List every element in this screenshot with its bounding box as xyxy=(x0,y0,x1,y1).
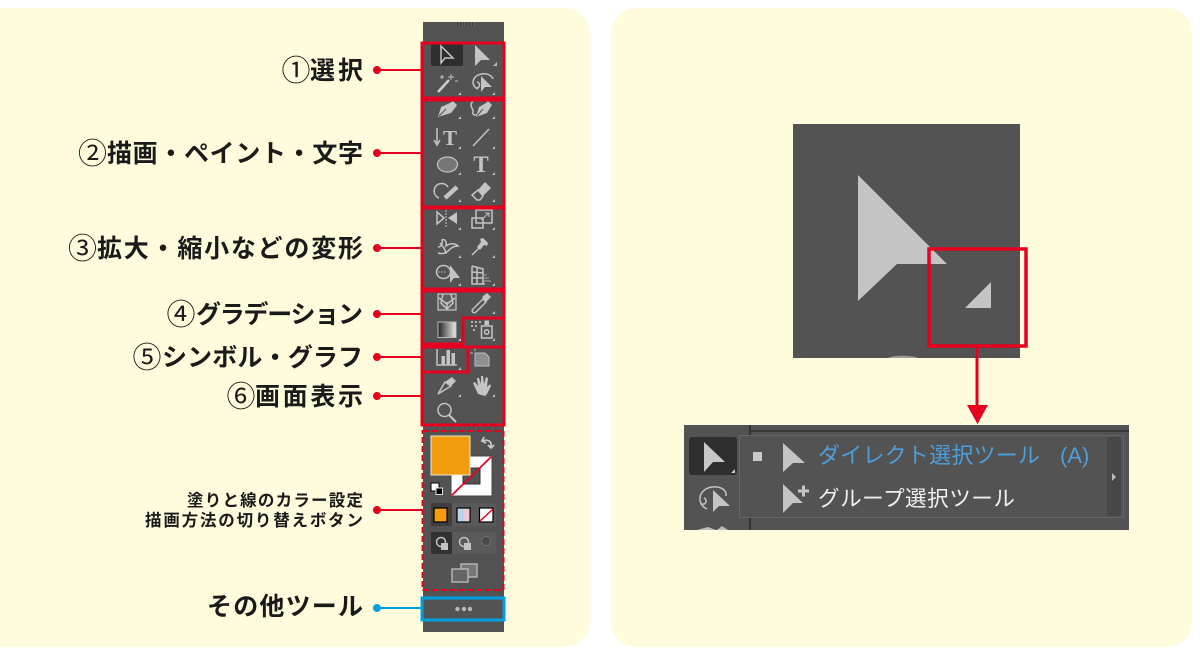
menu item: group selection: グループ選択ツール xyxy=(818,482,1015,513)
label: selection: ① xyxy=(281,48,311,90)
flyout corner marks xyxy=(458,62,497,397)
label: selection xyxy=(281,48,363,90)
icon: free transform xyxy=(436,265,460,283)
icon: symbol sprayer xyxy=(471,320,492,338)
label: fill and stroke xyxy=(145,487,363,531)
icon: lasso xyxy=(473,74,493,92)
icon: direct selection xyxy=(783,443,805,472)
blue outline: other tools xyxy=(422,598,504,620)
panel: left background xyxy=(0,8,590,647)
label: screen display: ⑥ xyxy=(226,374,256,416)
icon: line xyxy=(473,129,489,146)
icon: magic wand xyxy=(438,74,458,92)
icon: pen xyxy=(438,101,457,117)
label: drawing: 描画・ペイント・文字 xyxy=(107,134,363,170)
icon: screen mode xyxy=(452,564,477,582)
icon: lasso xyxy=(700,487,730,512)
active tool button xyxy=(689,437,737,475)
connector lines xyxy=(374,66,422,514)
icon: warp xyxy=(438,240,458,254)
flyout menu xyxy=(740,436,1124,518)
arrow: down xyxy=(967,346,988,424)
connector: other tools xyxy=(374,604,422,612)
icon: gradient xyxy=(438,322,456,338)
icon: slice xyxy=(438,377,456,394)
icon: bar chart xyxy=(437,349,457,365)
label: symbol and graph: シンボル・グラフ xyxy=(162,338,363,374)
icon: draw mode buttons xyxy=(431,532,496,554)
label: transform: 拡大・縮小などの変形 xyxy=(97,229,363,265)
icon: mesh xyxy=(438,294,456,310)
label: symbol and graph: ⑤ xyxy=(132,334,162,376)
icon: selection tool xyxy=(441,46,453,63)
icon: eraser xyxy=(472,182,491,200)
label: screen display: 画面表示 xyxy=(255,377,363,413)
menu shortcut: (A) xyxy=(1060,443,1089,468)
icon: ellipse xyxy=(438,157,458,172)
icon: group selection xyxy=(783,484,809,513)
icon: vertical type xyxy=(434,126,457,150)
icon: eyedropper xyxy=(472,293,491,313)
icon: perspective grid xyxy=(472,266,491,284)
panel: right background xyxy=(611,8,1192,647)
label: gradient: グラデーション xyxy=(196,295,363,331)
icon: vertical type: T xyxy=(443,126,457,150)
icon: fill and stroke xyxy=(431,436,494,496)
label: selection: 選択 xyxy=(310,51,363,87)
icon: shaper xyxy=(434,183,457,198)
flyout screenshot xyxy=(684,425,1129,530)
label: other tools: その他ツール xyxy=(207,587,363,623)
icon: type tool: T xyxy=(473,152,489,177)
icon: direct selection tool xyxy=(475,45,490,66)
icon: hand xyxy=(473,376,491,396)
label: screen display xyxy=(226,374,363,416)
icon: more tools dots xyxy=(455,607,472,611)
red group outlines xyxy=(422,43,504,590)
label: gradient: ④ xyxy=(166,292,196,334)
label: transform: ③ xyxy=(68,226,97,268)
highlight box xyxy=(929,249,1026,346)
icon: reflect xyxy=(437,210,457,228)
icon: scale xyxy=(472,210,492,228)
icon: curvature pen xyxy=(471,101,492,117)
panel: toolbar xyxy=(423,22,504,632)
icon: zoom xyxy=(438,404,456,422)
enlarged tool icon xyxy=(793,124,1020,358)
label: drawing: ② xyxy=(78,130,107,172)
label: fill and stroke: 塗りと線のカラー設定 xyxy=(187,487,363,511)
icon: artboard xyxy=(470,348,489,366)
label: fill and stroke: 描画方法の切り替えボタン xyxy=(145,507,363,531)
menu item: direct selection: ダイレクト選択ツール xyxy=(818,438,1040,470)
icon: color mode buttons xyxy=(431,503,496,526)
icon: pin xyxy=(472,238,488,255)
